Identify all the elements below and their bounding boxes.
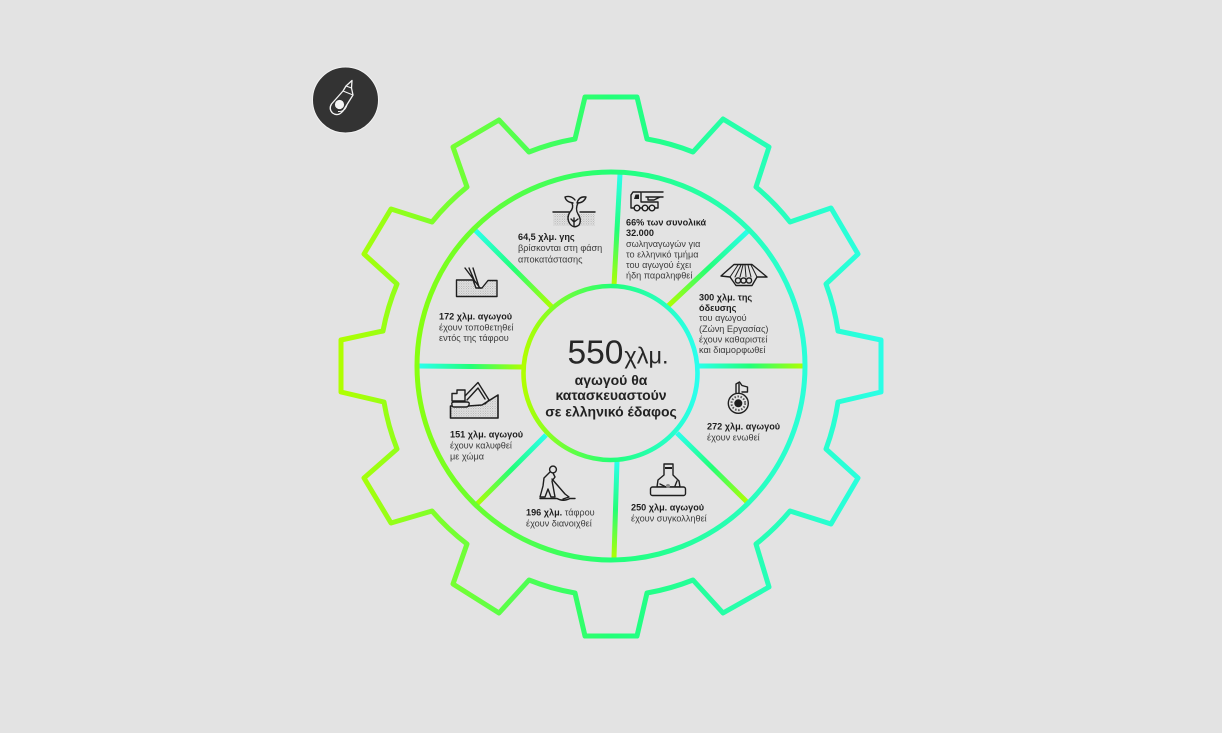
text: 66 percent	[626, 218, 707, 280]
icon: trench with tools	[456, 268, 497, 296]
icon: digging worker	[540, 466, 575, 500]
text: 196 km: έχουν διανοιχθεί	[526, 518, 592, 528]
text: 196 km: 196 χλμ. τάφρου	[526, 508, 595, 518]
text: 66 percent: ήδη παραληφθεί	[626, 270, 692, 280]
text: 66 percent: σωληναγωγών για	[626, 239, 701, 249]
text: 66 percent: το ελληνικό τμήμα	[626, 250, 699, 260]
text: 250 km	[631, 502, 707, 524]
text: 172 km: εντός της τάφρου	[439, 333, 509, 343]
text: 300 km: έχουν καθαριστεί	[699, 334, 767, 344]
text: 151 km: με χώμα	[450, 452, 485, 462]
text: 250 km: 250 χλμ. αγωγού	[631, 502, 704, 512]
text: 172 km	[439, 312, 513, 343]
spokes	[419, 174, 804, 558]
icon: welder	[650, 464, 686, 496]
central headline: κατασκευαστούν	[555, 387, 667, 403]
central headline: 550χλμ.	[568, 334, 669, 372]
text: 300 km: 300 χλμ. της	[699, 292, 752, 302]
central headline	[545, 334, 677, 420]
central headline: αγωγού θα	[575, 372, 648, 388]
text: 300 km	[699, 292, 768, 355]
text: 250 km: έχουν συγκολληθεί	[631, 514, 707, 524]
text: 64,5 km: αποκατάστασης	[518, 254, 583, 264]
icon: excavator on soil	[450, 382, 498, 418]
icon: right-of-way cross-section	[721, 264, 767, 286]
text: 300 km: και διαμορφωθεί	[699, 345, 765, 355]
text: 272 km: 272 χλμ. αγωγού	[707, 422, 780, 432]
text: 300 km: του αγωγού	[699, 313, 747, 323]
text: 272 km	[707, 422, 780, 442]
text: 151 km: 151 χλμ. αγωγού	[450, 430, 523, 440]
text: 196 km	[526, 508, 595, 528]
text: 300 km: όδευσης	[699, 303, 737, 313]
text: 172 km: έχουν τοποθετηθεί	[439, 322, 513, 332]
text: 272 km: έχουν ενωθεί	[707, 432, 760, 442]
icon: pipe end with clamp	[728, 382, 748, 413]
text: 64,5 km: 64,5 χλμ. γης	[518, 232, 575, 242]
icon: pipe badge	[312, 67, 378, 133]
text: 66 percent: 66% των συνολικά	[626, 218, 707, 228]
text: 300 km: (Ζώνη Εργασίας)	[699, 324, 768, 334]
icon: plant sprout	[553, 196, 595, 227]
text: 64,5 km: βρίσκονται στη φάση	[518, 243, 602, 253]
central headline: σε ελληνικό έδαφος	[545, 404, 677, 420]
text: 66 percent: του αγωγού έχει	[626, 260, 691, 270]
gear outline	[341, 97, 881, 636]
text: 151 km: έχουν καλυφθεί	[450, 440, 512, 450]
outer ring	[417, 172, 805, 560]
icon: pipe truck	[631, 192, 663, 211]
text: 151 km	[450, 430, 523, 462]
text: 64,5 km	[518, 232, 602, 264]
inner hub ring	[524, 286, 698, 460]
text: 172 km: 172 χλμ. αγωγού	[439, 312, 512, 322]
text: 66 percent: 32.000	[626, 228, 654, 238]
